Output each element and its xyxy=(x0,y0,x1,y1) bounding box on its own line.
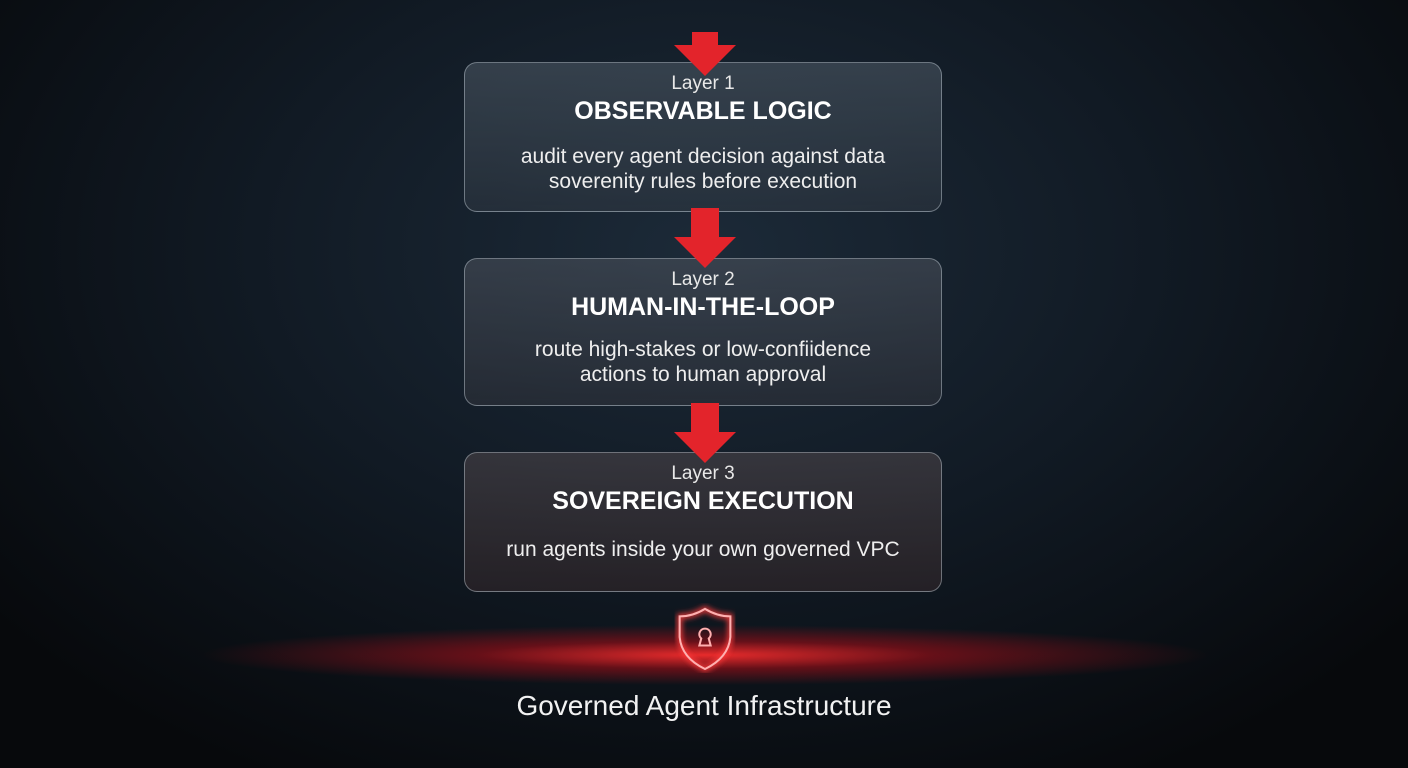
layer 1 description: audit every agent decision against data xyxy=(521,145,885,168)
layer 1 label: Layer 1 xyxy=(671,73,735,94)
layer 2 description xyxy=(535,338,871,386)
layer 2 description: route high-stakes or low-confiidence xyxy=(535,338,871,361)
layer 3 title: SOVEREIGN EXECUTION xyxy=(552,487,854,515)
footer text: Governed Agent Infrastructure xyxy=(516,690,892,721)
layer 1 description: soverenity rules before execution xyxy=(549,170,857,193)
layer 2 title: HUMAN-IN-THE-LOOP xyxy=(571,293,835,321)
layer 1 description xyxy=(521,145,886,193)
arrow 1 xyxy=(674,32,736,76)
layer 3 label: Layer 3 xyxy=(671,463,735,484)
panel: layer 2 xyxy=(464,258,942,406)
arrow 2 xyxy=(674,208,736,268)
layer 2 description: actions to human approval xyxy=(580,363,826,386)
panel: layer 1 xyxy=(464,62,942,212)
icon: shield with lock xyxy=(674,603,736,673)
panel: layer 3 xyxy=(464,452,942,592)
layer 1 title: OBSERVABLE LOGIC xyxy=(574,97,832,125)
arrow 3 xyxy=(674,403,736,463)
layer 3 description: run agents inside your own governed VPC xyxy=(506,538,900,561)
layer 2 label: Layer 2 xyxy=(671,269,735,290)
